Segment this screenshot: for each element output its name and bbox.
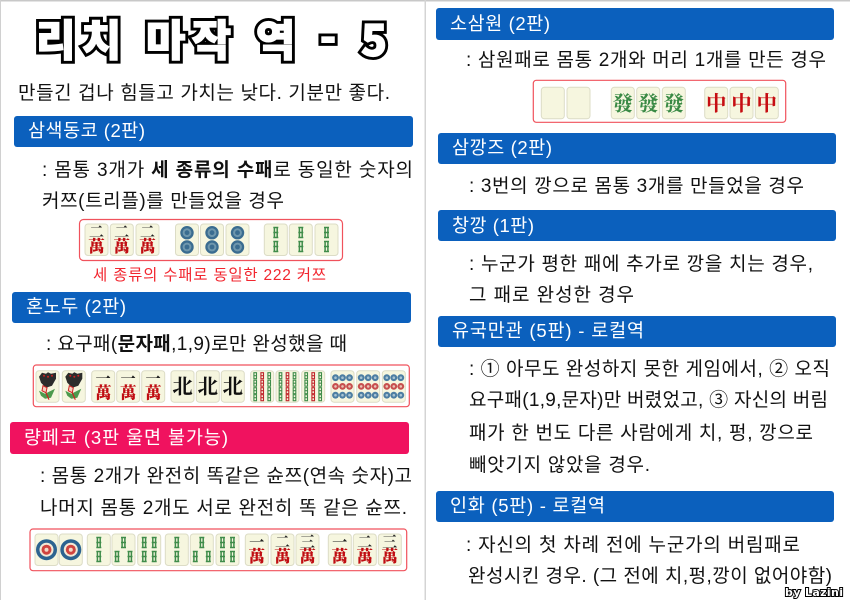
tiles: dragons (533, 80, 786, 122)
heading: 혼노두: 혼노두 (2판) (26, 296, 126, 317)
tiles: two identical sequences: 一 (249, 531, 264, 552)
description: 인화 (466, 534, 832, 587)
tiles: terminals and honors: 一 (121, 368, 136, 389)
heading: 소삼원 (436, 8, 834, 40)
panel: 삼깡즈 (438, 133, 836, 197)
tiles: two identical sequences (30, 529, 407, 571)
tiles: two identical sequences: 萬 (249, 543, 266, 567)
description: 량페코: : 몸통 2개가 완전히 똑같은 슌쯔(연속 숫자)고 (40, 465, 412, 487)
heading: 삼색동코 (14, 116, 413, 147)
description: 량페코: 나머지 몸통 2개도 서로 완전히 똑 같은 슌쯔. (40, 497, 407, 519)
panel: 혼노두 (12, 292, 411, 407)
heading: 유국만관 (438, 316, 836, 347)
credit: by Lazini (785, 586, 843, 599)
tiles: two identical sequences: 三 (382, 531, 397, 552)
tiles: terminals and honors: 北 (198, 370, 218, 400)
tiles: 222 triplets: 萬 (88, 233, 105, 257)
tiles: terminals and honors: 北 (223, 370, 243, 400)
panel: 량페코 (10, 422, 412, 571)
panel: 유국만관 (438, 316, 836, 476)
tiles: terminals and honors: 萬 (145, 380, 162, 404)
heading: 량페코 (10, 422, 409, 454)
description: 삼깡즈: : 3번의 깡으로 몸통 3개를 만들었을 경우 (469, 175, 804, 197)
description: 삼색동코: : 몸통 3개가 세 종류의 수패로 동일한 숫자의 (42, 159, 413, 181)
description: 유국만관: 빼앗기지 않았을 경우. (469, 454, 650, 476)
caption: 세 종류의 수패로 동일한 222 커쯔 (93, 266, 326, 284)
tiles: two identical sequences: 三 (300, 531, 315, 552)
panel: 창깡 (438, 210, 836, 306)
tiles: two identical sequences: 二 (275, 531, 290, 552)
heading: 혼노두 (12, 292, 411, 323)
credit: by Lazini (785, 586, 843, 599)
tiles: dragons: 中 (706, 86, 726, 116)
heading: 삼색동코: 삼색동코 (2판) (28, 120, 145, 141)
tiles: terminals and honors (33, 365, 409, 407)
tiles: two identical sequences: 萬 (382, 543, 399, 567)
panel: 삼색동코 (14, 116, 413, 284)
description: 량페코 (40, 465, 412, 519)
description: 소삼원: : 삼원패로 몸통 2개와 머리 1개를 만든 경우 (466, 49, 826, 71)
description: 유국만관: : ① 아무도 완성하지 못한 게임에서, ② 오직 (469, 358, 830, 380)
tiles: two identical sequences: 萬 (332, 543, 349, 567)
tiles: 222 triplets: 萬 (139, 233, 156, 257)
heading: 삼깡즈 (438, 133, 836, 164)
description: 유국만관 (469, 358, 830, 476)
tiles: two identical sequences: 萬 (357, 543, 374, 567)
heading: 인화: 인화 (5판) - 로컬역 (450, 495, 605, 516)
title: 리치 마작 역 - 5 (36, 7, 387, 69)
tiles: terminals and honors: 一 (146, 368, 161, 389)
tiles: 222 triplets: 二 (140, 221, 155, 242)
tiles: 222 triplets: 二 (114, 221, 129, 242)
tiles: two identical sequences: 一 (332, 531, 347, 552)
description: 창깡: : 누군가 평한 패에 추가로 깡을 치는 경우, (469, 253, 813, 275)
description: 유국만관: 패가 한 번도 다른 사람에게 치, 펑, 깡으로 (469, 422, 813, 444)
tiles: dragons: 中 (757, 86, 777, 116)
panel: 인화 (436, 491, 834, 587)
heading: 창깡 (438, 210, 836, 241)
tiles: terminals and honors: 萬 (95, 380, 112, 404)
heading: 인화 (436, 491, 834, 522)
tiles: two identical sequences: 萬 (274, 543, 291, 567)
tiles: terminals and honors: 萬 (120, 380, 137, 404)
title: 리치 마작 역 - 5 (36, 7, 387, 69)
tiles: two identical sequences: 二 (357, 531, 372, 552)
tiles: 222 triplets: 萬 (114, 233, 131, 257)
heading: 소삼원: 소삼원 (2판) (450, 13, 550, 34)
description: 인화: 완성시킨 경우. (그 전에 치,펑,깡이 없어야함) (468, 565, 832, 587)
heading: 삼깡즈: 삼깡즈 (2판) (452, 137, 552, 158)
tiles: terminals and honors: 一 (96, 368, 111, 389)
heading: 유국만관: 유국만관 (5판) - 로컬역 (452, 320, 644, 341)
description: 삼색동코 (42, 159, 413, 212)
description: 유국만관: 요구패(1,9,문자)만 버렸었고, ③ 자신의 버림 (469, 389, 828, 411)
description: 창깡 (469, 253, 813, 306)
tiles: 222 triplets (80, 220, 342, 260)
description: 인화: : 자신의 첫 차례 전에 누군가의 버림패로 (466, 534, 800, 556)
intro text: 만들긴 겁나 힘들고 가치는 낮다. 기분만 좋다. (18, 82, 390, 104)
panel: 소삼원 (436, 8, 834, 122)
tiles: terminals and honors: 北 (172, 370, 193, 400)
description: 창깡: 그 패로 완성한 경우 (469, 284, 634, 306)
tiles: dragons: 發 (664, 86, 685, 116)
description: 혼노두: : 요구패(문자패,1,9)로만 완성했을 때 (46, 333, 347, 355)
tiles: dragons: 發 (613, 86, 634, 116)
tiles: dragons: 中 (731, 86, 752, 116)
tiles: 222 triplets: 二 (89, 221, 104, 242)
description: 삼색동코: 커쯔(트리플)를 만들었을 경우 (42, 190, 284, 212)
heading: 창깡: 창깡 (1판) (452, 215, 534, 236)
tiles: two identical sequences: 萬 (299, 543, 316, 567)
tiles: dragons: 發 (638, 86, 659, 116)
heading: 량페코: 량페코 (3판 울면 불가능) (24, 427, 228, 448)
